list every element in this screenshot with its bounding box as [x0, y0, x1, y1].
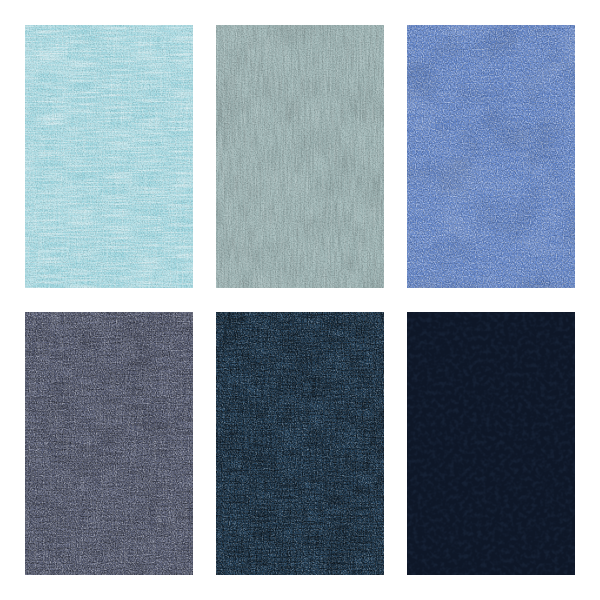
swatch: grey-green linen	[216, 25, 384, 288]
swatch: deep teal-blue denim	[216, 312, 384, 575]
swatch: cornflower blue chambray	[407, 25, 575, 288]
swatch: midnight navy wool	[407, 312, 575, 575]
swatch: slate grey melange	[25, 312, 193, 575]
swatch: pale aqua linen	[25, 25, 193, 288]
